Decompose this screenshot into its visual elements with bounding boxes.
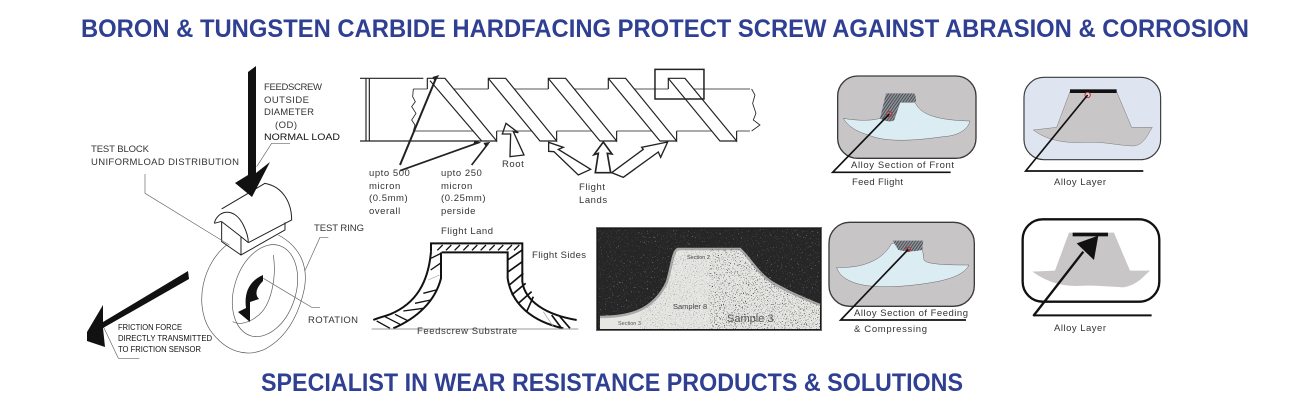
label: rotation: ROTATION bbox=[308, 315, 358, 326]
label: flight sides: Flight Sides bbox=[532, 250, 586, 261]
photo: micrograph of hardfacing sample: Section 2 bbox=[687, 255, 710, 261]
label: upto 250 micron: upto 250 bbox=[441, 168, 482, 179]
label: feedscrew outside diameter: OUTSIDE bbox=[264, 95, 309, 106]
photo: micrograph of hardfacing sample: Sampler 8 bbox=[673, 302, 707, 311]
label: friction force: FRICTION FORCE bbox=[118, 322, 182, 332]
label: alloy section of feeding and compressing: Alloy Section of Feeding bbox=[854, 308, 968, 319]
panel: screw flights diagram bbox=[360, 69, 760, 217]
flight cross section bbox=[372, 243, 578, 329]
label: feedscrew outside diameter: (OD) bbox=[275, 120, 297, 131]
label: upto 250 micron: perside bbox=[441, 206, 476, 217]
label: alloy layer: Alloy Layer bbox=[1054, 323, 1106, 334]
label: alloy layer: Alloy Layer bbox=[1054, 177, 1106, 188]
panel: wear test diagram bbox=[87, 66, 364, 358]
label: upto 500 micron: (0.5mm) bbox=[369, 193, 408, 204]
icon: test block and ring drawing bbox=[103, 143, 328, 358]
label: flight land: Flight Land bbox=[441, 226, 493, 237]
label: alloy section of front feed flight: Alloy Section of Front bbox=[851, 160, 954, 171]
label: upto 250 micron: (0.25mm) bbox=[441, 193, 486, 204]
label: upto 500 micron: upto 500 bbox=[369, 168, 410, 179]
label: friction force: TO FRICTION SENSOR bbox=[118, 344, 201, 354]
label: upto 250 micron: micron bbox=[441, 181, 473, 192]
photo: micrograph of hardfacing sample: Section 3 bbox=[618, 321, 641, 327]
arrow: rotation bbox=[238, 275, 263, 322]
label: feedscrew outside diameter: FEEDSCREW bbox=[264, 82, 322, 93]
panel: alloy section of front feed flight bbox=[833, 76, 976, 188]
arrow: friction force bbox=[87, 271, 189, 347]
title: BORON & TUNGSTEN CARBIDE HARDFACING PROTECT SCREW AGAINST ABRASION & CORROSION bbox=[81, 15, 1249, 43]
label: flight lands: Flight bbox=[579, 182, 606, 193]
panel: alloy layer top bbox=[1024, 77, 1161, 188]
label: test block: UNIFORMLOAD DISTRIBUTION bbox=[91, 157, 239, 168]
label: alloy section of front feed flight: Feed Flight bbox=[852, 177, 903, 188]
label: feedscrew outside diameter: DIAMETER bbox=[264, 107, 314, 118]
panel: alloy section of feeding and compressing bbox=[829, 222, 974, 335]
label: flight lands: Lands bbox=[579, 195, 608, 206]
label: upto 500 micron: overall bbox=[369, 206, 401, 217]
label: feedscrew substrate: Feedscrew Substrate bbox=[417, 326, 517, 337]
photo: micrograph of hardfacing sample bbox=[596, 227, 822, 331]
label: test ring: TEST RING bbox=[314, 223, 364, 234]
label: friction force: DIRECTLY TRANSMITTED bbox=[118, 333, 212, 343]
arrow: normal load bbox=[235, 66, 270, 197]
photo: micrograph of hardfacing sample: Sample 3 bbox=[727, 313, 773, 325]
label: root: Root bbox=[502, 159, 524, 170]
label: upto 500 micron: micron bbox=[369, 181, 401, 192]
label: test block: TEST BLOCK bbox=[91, 144, 150, 155]
screw drawing bbox=[360, 69, 760, 177]
panel: hardfaced flight profile bbox=[372, 226, 586, 337]
label: normal load: NORMAL LOAD bbox=[264, 132, 340, 143]
label: alloy section of feeding and compressing: & Compressing bbox=[854, 324, 927, 335]
subtitle: SPECIALIST IN WEAR RESISTANCE PRODUCTS & SOLUTIONS bbox=[261, 369, 963, 397]
panel: alloy layer bottom bbox=[1023, 219, 1159, 334]
